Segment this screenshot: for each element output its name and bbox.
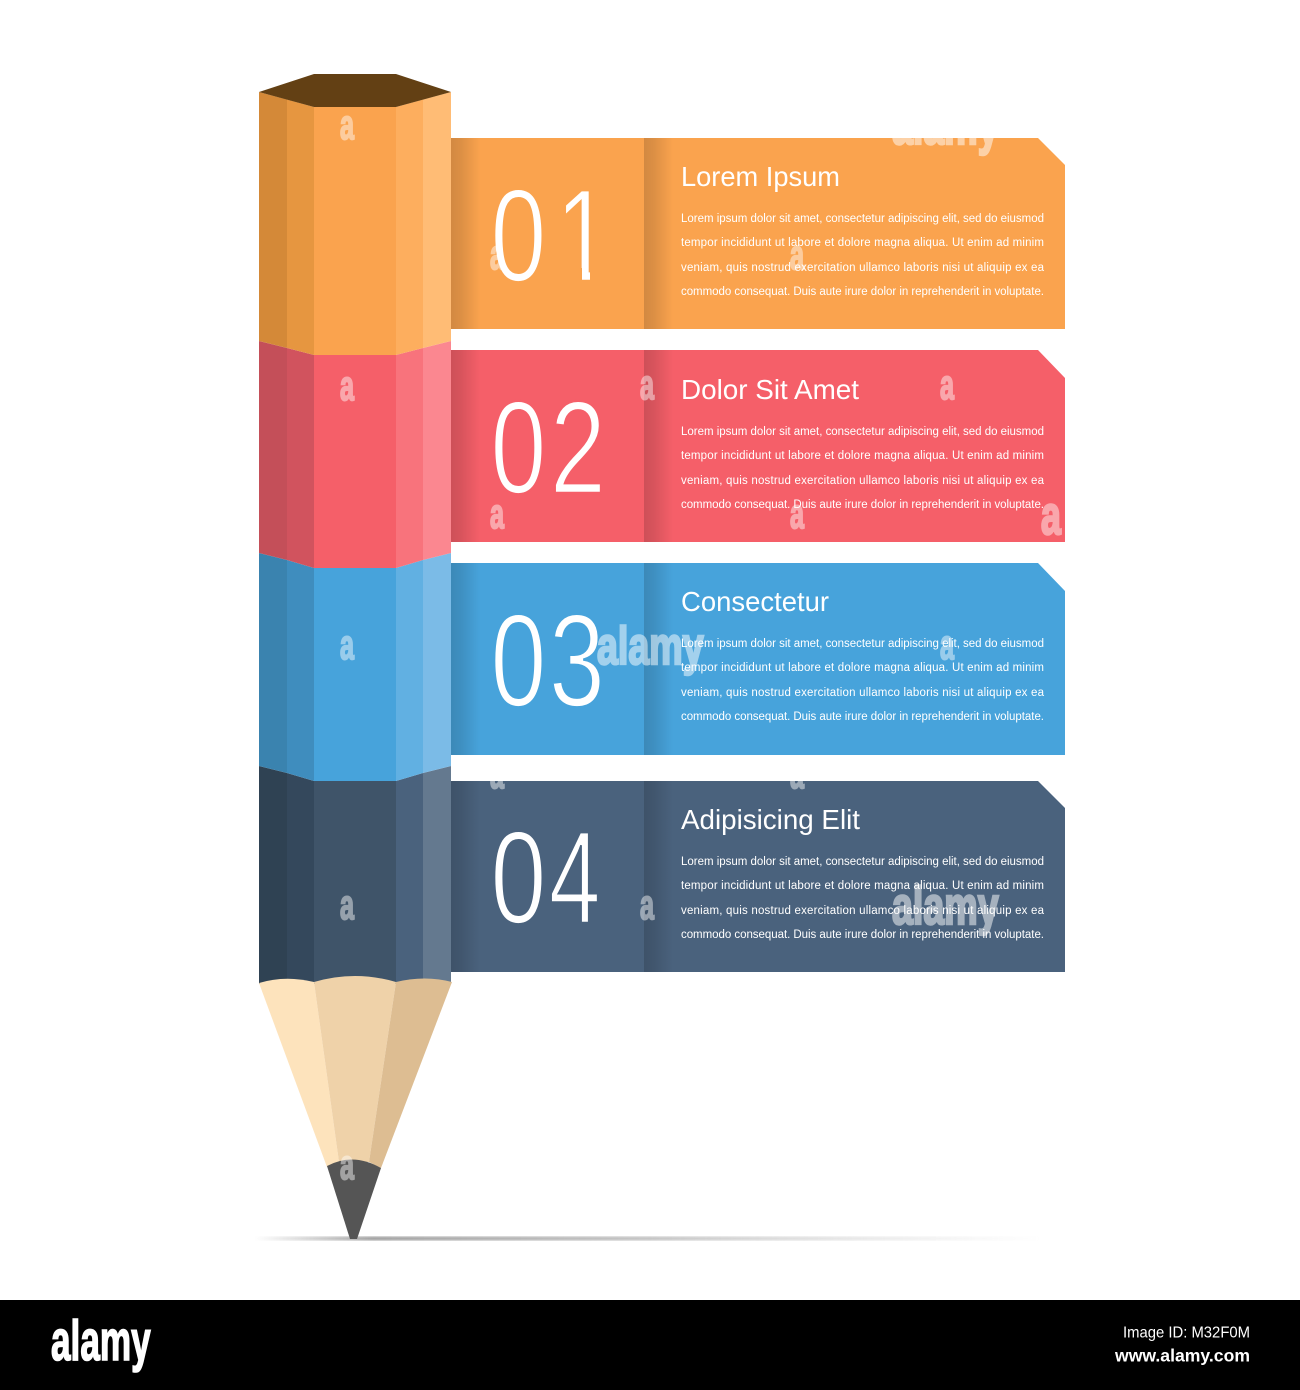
text block 1: tempor incididunt ut labore et dolore magna aliqua. Ut enim ad minim <box>681 237 1044 249</box>
heading: Lorem Ipsum: Lorem Ipsum <box>681 161 840 192</box>
number 04: 4 <box>549 805 600 952</box>
number 03 <box>490 587 605 734</box>
text block 2: tempor incididunt ut labore et dolore magna aliqua. Ut enim ad minim <box>681 450 1044 462</box>
website: www.alamy.com <box>1114 1346 1250 1366</box>
text block 3: Lorem ipsum dolor sit amet, consectetur adipiscing elit, sed do eiusmod <box>681 638 1044 650</box>
watermarks: a <box>940 363 955 409</box>
number 02: 2 <box>550 374 606 521</box>
watermarks: a <box>490 752 505 798</box>
watermarks: a <box>790 233 805 279</box>
pencil navy section <box>259 766 451 984</box>
number 04: 0 <box>490 804 546 951</box>
text block 3: commodo consequat. Duis aute irure dolor in reprehenderit in voluptate. <box>681 711 1044 723</box>
text block 4: veniam, quis nostrud exercitation ullamco laboris nisi ut aliquip ex ea <box>681 905 1045 917</box>
text block 2 <box>681 426 1045 511</box>
text block 3: veniam, quis nostrud exercitation ullamco laboris nisi ut aliquip ex ea <box>681 687 1045 699</box>
number 03: 0 <box>490 587 546 734</box>
pencil orange section <box>259 92 451 355</box>
pencil blue section <box>259 553 451 781</box>
number 01: 1 <box>556 162 611 309</box>
text block 3: tempor incididunt ut labore et dolore magna aliqua. Ut enim ad minim <box>681 662 1044 674</box>
text block 1: Lorem ipsum dolor sit amet, consectetur adipiscing elit, sed do eiusmod <box>681 213 1044 225</box>
text block 4: commodo consequat. Duis aute irure dolor in reprehenderit in voluptate. <box>681 929 1044 941</box>
watermarks: a <box>340 1143 355 1189</box>
pencil <box>259 74 452 1239</box>
text block 4: Lorem ipsum dolor sit amet, consectetur adipiscing elit, sed do eiusmod <box>681 856 1044 868</box>
footer logo: alamy <box>51 1311 151 1373</box>
heading: Consectetur: Consectetur <box>681 586 829 617</box>
watermarks: alamy <box>892 877 999 936</box>
number 01 <box>495 190 590 282</box>
watermarks: a <box>490 233 505 279</box>
text block 3 <box>681 638 1045 723</box>
number 02: 0 <box>490 374 546 521</box>
watermarks: alamy <box>892 97 999 156</box>
panel: 01 Lorem Ipsum <box>451 138 1065 329</box>
text block 4: tempor incididunt ut labore et dolore magna aliqua. Ut enim ad minim <box>681 880 1044 892</box>
footer bar <box>0 1300 1300 1390</box>
text block 1: commodo consequat. Duis aute irure dolor in reprehenderit in voluptate. <box>681 286 1044 298</box>
watermarks: a <box>340 883 355 929</box>
watermarks: a <box>340 364 355 410</box>
image id: Image ID: M32F0M <box>1123 1324 1250 1342</box>
text block 1 <box>681 213 1045 298</box>
text block 2: commodo consequat. Duis aute irure dolor in reprehenderit in voluptate. <box>681 499 1044 511</box>
panel: 03 Consectetur <box>451 563 1065 755</box>
watermarks <box>340 97 1061 1189</box>
heading: Adipisicing Elit: Adipisicing Elit <box>681 804 860 835</box>
heading: Dolor Sit Amet: Dolor Sit Amet <box>681 374 859 405</box>
text block 2: Lorem ipsum dolor sit amet, consectetur adipiscing elit, sed do eiusmod <box>681 426 1044 438</box>
number 02 <box>490 374 606 521</box>
pencil eraser end <box>259 74 451 107</box>
panel: 04 Adipisicing Elit <box>451 781 1065 972</box>
number 03: 3 <box>549 587 605 734</box>
ground shadow <box>255 1236 1040 1240</box>
watermarks: a <box>790 492 805 538</box>
text block 2: veniam, quis nostrud exercitation ullamco laboris nisi ut aliquip ex ea <box>681 475 1045 487</box>
watermarks: a <box>340 623 355 669</box>
number 01: 0 <box>490 162 546 309</box>
panel: 02 Dolor Sit Amet <box>451 350 1065 542</box>
pencil lead <box>327 1159 381 1239</box>
watermarks: a <box>340 103 355 149</box>
watermarks: a <box>640 363 655 409</box>
watermarks: a <box>490 492 505 538</box>
text block 1: veniam, quis nostrud exercitation ullamco laboris nisi ut aliquip ex ea <box>681 262 1045 274</box>
watermarks: a <box>790 752 805 798</box>
text block 4 <box>681 856 1045 941</box>
number 04 <box>490 804 600 952</box>
watermarks: a <box>640 883 655 929</box>
watermarks: a <box>1041 484 1061 546</box>
pencil red section <box>259 341 451 568</box>
pencil wood tip <box>259 976 452 1168</box>
watermarks: alamy <box>597 617 704 676</box>
watermarks: a <box>940 623 955 669</box>
